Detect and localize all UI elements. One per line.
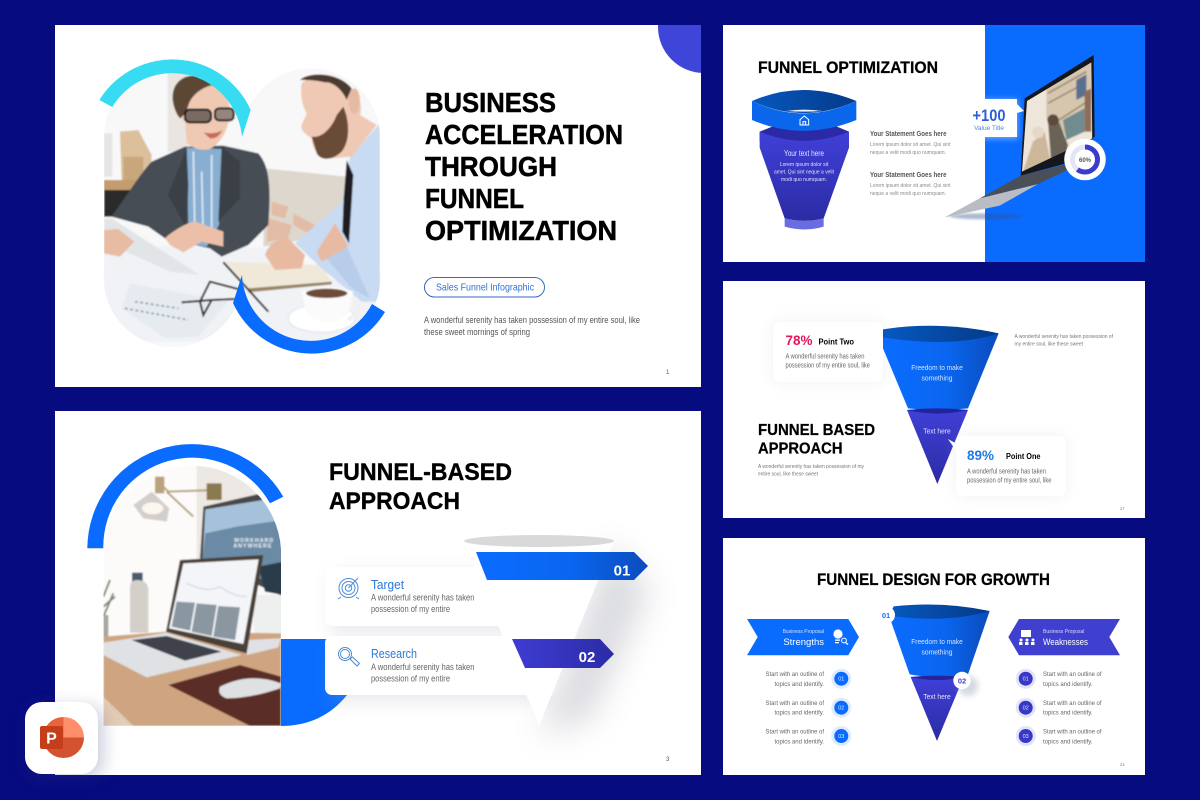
ribbon: weaknesses: Business Proposal: [1043, 629, 1084, 635]
icon: idea search: [833, 629, 848, 644]
ribbon: strengths: Strengths: [783, 637, 824, 648]
heading: APPROACH: [758, 440, 842, 458]
funnel labels: Text here: [923, 426, 951, 436]
icon: audience: [1019, 630, 1034, 645]
man's head: [301, 77, 377, 158]
card shadow: [773, 322, 883, 382]
title: FUNNEL: [425, 183, 524, 214]
donut chart 60%: [1064, 139, 1106, 180]
statement 1: Lorem ipsum dolor sit amet. Qui sint: [870, 142, 951, 148]
card: point two: possession of my entire soul, like: [786, 362, 870, 370]
heading: FUNNEL-BASED: [329, 459, 512, 486]
title: THROUGH: [425, 151, 557, 182]
icon: PowerPoint app badge: P: [46, 730, 57, 748]
heading: [329, 463, 512, 510]
statement 2: neque a velit modi quo numquam.: [870, 191, 946, 197]
step marker 01: [878, 606, 895, 624]
ribbon: weaknesses: [1008, 619, 1120, 655]
panel: title slide: [55, 25, 701, 387]
list right: topics and identify.: [1043, 682, 1093, 688]
funnel labels: Text here: [923, 692, 951, 701]
photo: desk with laptop: [103, 466, 281, 726]
card: target: [328, 570, 498, 626]
card: point two: 78%: [786, 332, 813, 348]
page number: 1: [666, 370, 670, 376]
card: research: possession of my entire: [371, 674, 450, 684]
funnel: lower section: [907, 408, 968, 484]
statement 2: Lorem ipsum dolor sit amet. Qui sint: [870, 183, 951, 189]
side note: [1014, 334, 1113, 348]
mouse pad: [168, 665, 281, 726]
statement 2: Your Statement Goes here: [870, 170, 946, 179]
panel: funnel-based approach large slide: [55, 411, 701, 775]
list right: Start with an outline of: [1043, 672, 1102, 678]
number badges left: 01: [838, 677, 844, 683]
step marker 01: 01: [882, 611, 890, 620]
number badges right: 01: [1023, 677, 1029, 683]
ribbon 02: [512, 639, 614, 668]
blue arch: [87, 444, 283, 548]
card: target: possession of my entire: [371, 604, 450, 614]
ribbon: strengths: [747, 619, 859, 655]
list left: topics and identify.: [774, 711, 824, 717]
step marker 02: 02: [958, 676, 966, 686]
photo: desk with laptop: WORKHARD: [234, 538, 274, 544]
card: point two: A wonderful serenity has taken: [786, 354, 865, 360]
ribbon 01: [476, 552, 648, 580]
list right: topics and identify.: [1043, 711, 1093, 717]
list left: topics and identify.: [774, 682, 824, 688]
list right: Start with an outline of: [1043, 701, 1102, 707]
photo: business meeting: [104, 73, 380, 342]
icon: home: [800, 116, 809, 125]
lamp: [163, 486, 208, 518]
donut chart 60%: 60%: [1079, 158, 1092, 164]
funnel labels: Freedom to make: [911, 637, 963, 646]
page number: 23: [1120, 762, 1125, 767]
laptop: [945, 55, 1096, 219]
page number: 3: [666, 757, 670, 763]
title: [425, 87, 623, 246]
description: these sweet mornings of spring: [424, 327, 530, 338]
list left: [766, 672, 824, 745]
ribbon: weaknesses: Weaknesses: [1043, 637, 1088, 648]
description: [758, 464, 864, 478]
3D funnel: [752, 90, 856, 229]
panel: funnel optimization slide: [723, 25, 1145, 262]
list left: Start with an outline of: [766, 672, 824, 678]
list right: topics and identify.: [1043, 739, 1093, 745]
statement 1: Your Statement Goes here: [870, 129, 946, 138]
callout: +100 value: +100: [972, 107, 1006, 125]
funnel labels: [911, 363, 963, 436]
photo: desk with laptop: ANYWHERE: [233, 543, 272, 549]
card: point one: 89%: [967, 447, 995, 463]
blue quarter shape: [281, 639, 347, 726]
title: ACCELERATION: [425, 119, 623, 150]
funnel: upper section: [889, 604, 990, 677]
description: A wonderful serenity has taken possession of my: [758, 464, 864, 470]
card: research: [325, 636, 526, 695]
side note: my entire soul, like these sweet: [1014, 342, 1083, 348]
funnel labels: Freedom to make: [911, 363, 963, 372]
list right: Start with an outline of: [1043, 730, 1102, 736]
blue side panel: [985, 25, 1145, 262]
funnel text: amet. Qui sint neque a velit: [774, 170, 834, 176]
desk: [103, 632, 281, 726]
card: target: Target: [371, 578, 404, 592]
statement 1: [870, 129, 951, 156]
card: research: Research: [371, 647, 417, 661]
glasses on table: [182, 262, 268, 315]
card shadows: [326, 626, 530, 705]
description: entire soul, like these sweet: [758, 472, 818, 478]
funnel labels: something: [922, 647, 952, 656]
card: point one: [948, 436, 1066, 496]
description: [424, 316, 640, 337]
icon: PowerPoint app badge: [25, 702, 104, 778]
ribbon 02: 02: [579, 649, 595, 666]
corner circle: [658, 25, 701, 73]
statement 2: [870, 170, 951, 197]
card: point two: Point Two: [818, 338, 854, 346]
list left: Start with an outline of: [766, 730, 824, 736]
coffee cup: [290, 308, 354, 331]
tag pill: Sales Funnel Infographic: [436, 282, 534, 294]
panel: funnel design for growth slide: [723, 538, 1145, 775]
statement 1: neque a velit modi quo numquam.: [870, 150, 946, 156]
funnel labels: [911, 637, 963, 701]
card: research: A wonderful serenity has taken: [371, 662, 474, 672]
tag pill: [424, 278, 544, 297]
title: FUNNEL OPTIMIZATION: [758, 59, 938, 77]
funnel text: Lorem ipsum dolor sit: [780, 162, 829, 168]
plant: [103, 580, 115, 617]
card shadow: [956, 436, 1066, 496]
card: point two: [773, 322, 883, 382]
card: point one: Point One: [1006, 452, 1041, 461]
step marker 02: [953, 672, 978, 696]
icon: target: [338, 578, 359, 599]
bottle: [132, 573, 143, 582]
funnel text: Your text here: [784, 149, 824, 158]
number badges left: 02: [838, 706, 844, 712]
side note: A wonderful serenity has taken possession of: [1014, 334, 1113, 340]
card: point one: A wonderful serenity has taken: [967, 468, 1046, 476]
list right: [1043, 672, 1102, 745]
funnel labels: something: [922, 374, 952, 382]
heading: FUNNEL BASED: [758, 422, 875, 439]
man's shirt: [295, 123, 380, 302]
page number: 27: [1120, 506, 1125, 511]
icon: magnifier: [338, 648, 360, 666]
number badges left: [831, 669, 851, 746]
ribbon 01: 01: [614, 562, 630, 580]
tablet: [104, 218, 200, 275]
number badges right: [1016, 669, 1036, 746]
callout: +100 value: Value Title: [974, 125, 1004, 132]
ribbon: strengths: Business Proposal: [783, 629, 824, 635]
card: point one: possession of my entire soul, like: [967, 478, 1052, 484]
number badges right: 03: [1023, 734, 1029, 740]
funnel: lower section: [911, 676, 964, 741]
list left: topics and identify.: [774, 739, 824, 745]
card: target: A wonderful serenity has taken: [371, 592, 474, 602]
list left: Start with an outline of: [766, 701, 824, 707]
title: BUSINESS: [425, 87, 556, 118]
funnel text: [774, 149, 834, 183]
number badges left: 03: [838, 734, 844, 740]
white funnel: [464, 535, 614, 726]
funnel: upper section: [883, 326, 999, 410]
title: FUNNEL DESIGN FOR GROWTH: [817, 571, 1050, 589]
funnel shadow: [540, 545, 650, 735]
laptop: [247, 638, 281, 655]
cyan arc: [99, 59, 251, 137]
heading: APPROACH: [329, 488, 460, 515]
number badges right: 02: [1023, 706, 1029, 712]
panel: funnel based approach slide: [723, 281, 1145, 518]
paper on table: [122, 283, 228, 338]
monitor: [200, 488, 283, 597]
funnel text: modi quo numquam.: [781, 177, 827, 183]
blue arc: [233, 275, 385, 354]
description: A wonderful serenity has taken possession of my entire soul, like: [424, 315, 640, 326]
title: OPTIMIZATION: [425, 215, 617, 246]
notebook: [223, 262, 332, 292]
heading: [758, 422, 875, 458]
callout: +100 value: [962, 99, 1024, 139]
